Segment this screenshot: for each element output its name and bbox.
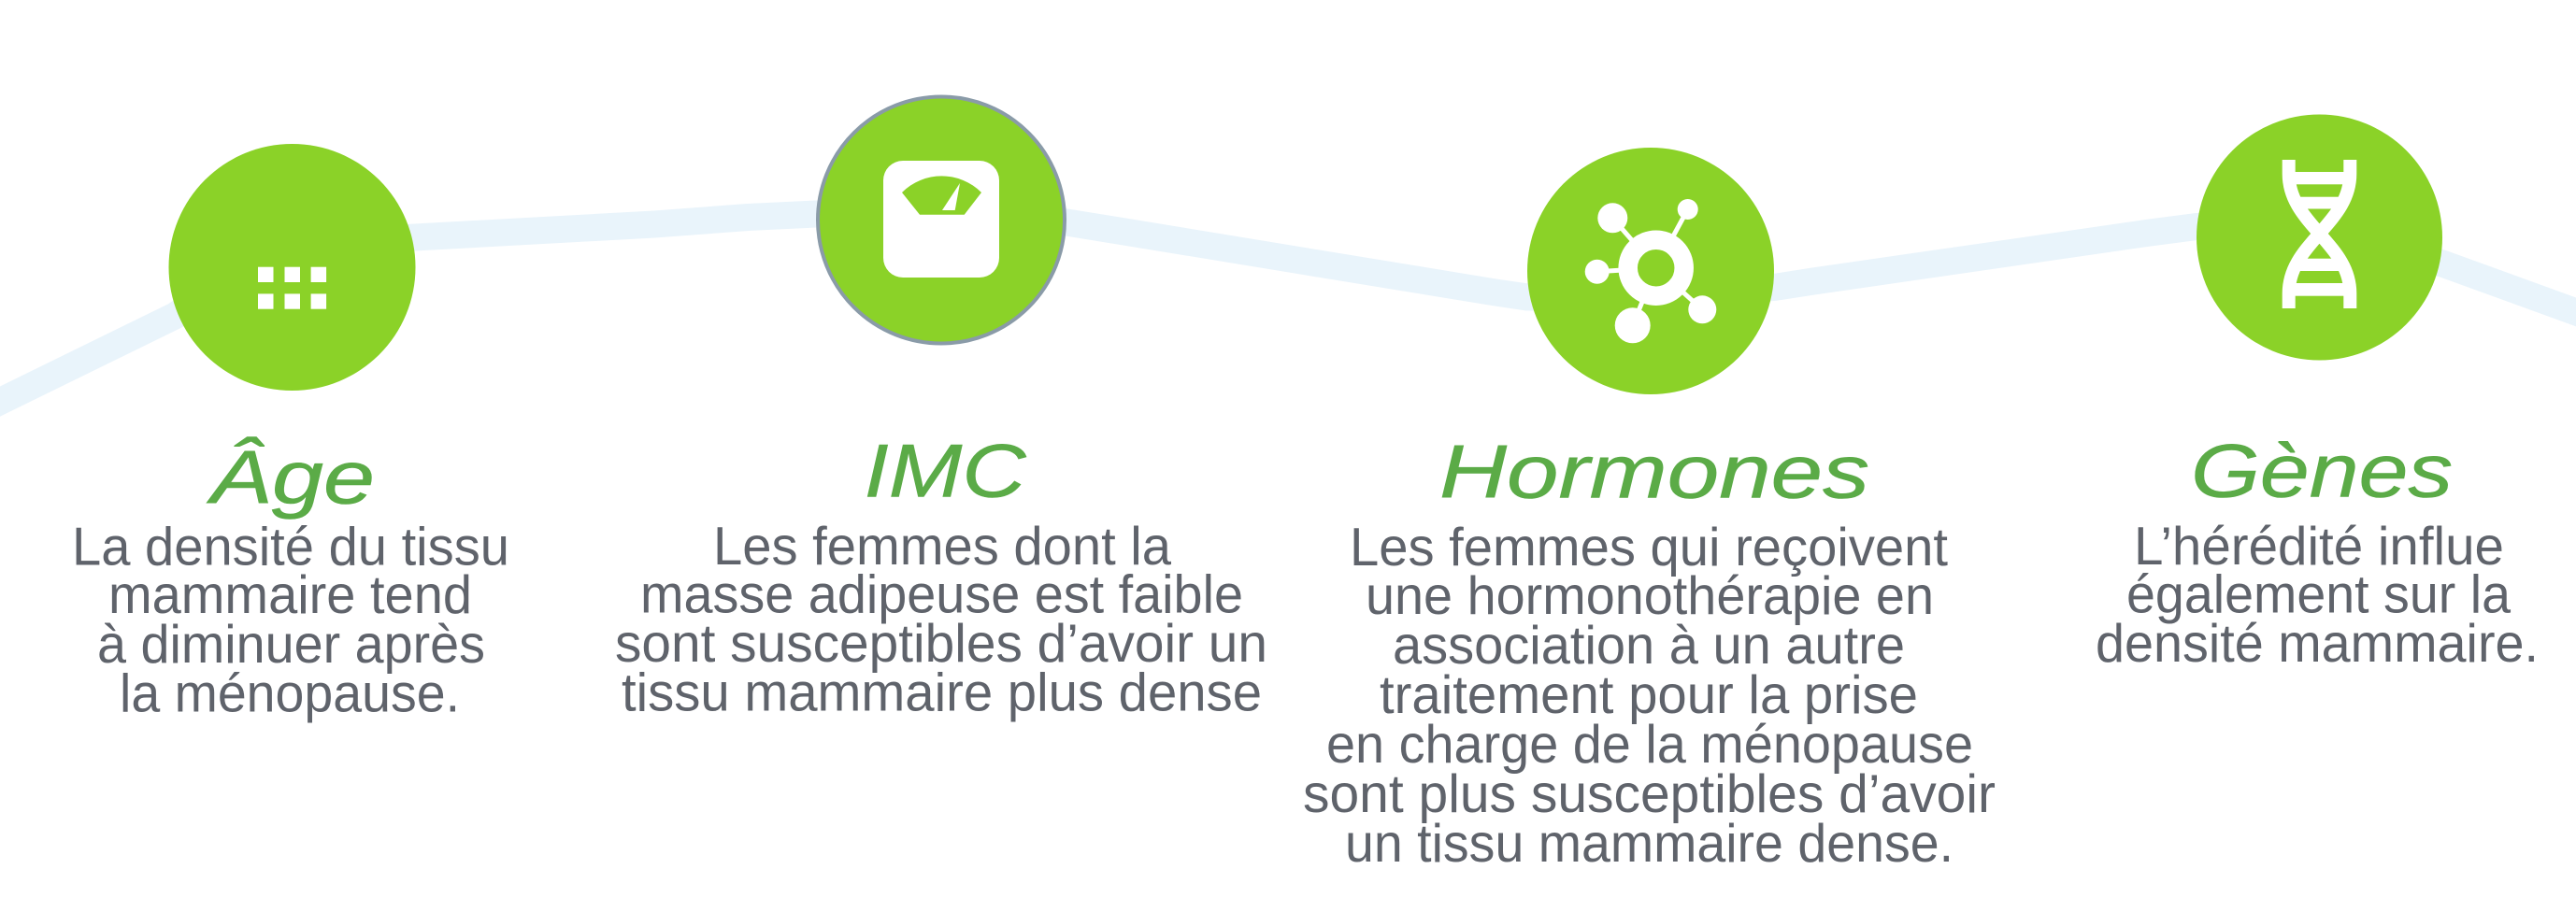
text block: hormones description: sont plus susceptibles d’avoir bbox=[1303, 764, 1996, 824]
text block: genes description bbox=[2096, 517, 2539, 674]
text block: hormones description: un tissu mammaire dense. bbox=[1345, 814, 1953, 874]
text block: BMI description: masse adipeuse est faible bbox=[640, 565, 1243, 625]
text block: hormones description bbox=[1303, 518, 1996, 874]
text block: BMI description: tissu mammaire plus dense bbox=[622, 663, 1262, 723]
text block: age description: mammaire tend bbox=[108, 565, 472, 625]
panel: genes bbox=[2096, 114, 2539, 674]
text block: BMI description: sont susceptibles d’avoir un bbox=[615, 614, 1267, 674]
text block: BMI description bbox=[615, 517, 1267, 723]
icon: age circle with grid bbox=[168, 144, 415, 391]
text block: age description: La densité du tissu bbox=[72, 518, 509, 577]
text block: age description bbox=[72, 518, 509, 724]
text block: hormones description: une hormonothérapie en bbox=[1366, 566, 1934, 626]
heading: hormones: Hormones bbox=[1439, 430, 1869, 514]
text block: age description: la ménopause. bbox=[120, 664, 460, 724]
heading: genes: Gènes bbox=[2191, 430, 2453, 514]
text block: age description: à diminuer après bbox=[97, 615, 485, 675]
text block: genes description: densité mammaire. bbox=[2096, 614, 2539, 674]
icon: molecule bbox=[1527, 148, 1774, 394]
panel: age bbox=[72, 144, 509, 724]
text block: hormones description: Les femmes qui reçoivent bbox=[1350, 518, 1948, 577]
text block: hormones description: association à un autre bbox=[1393, 616, 1905, 676]
text block: genes description: L’hérédité influe bbox=[2134, 517, 2504, 577]
text block: BMI description: Les femmes dont la bbox=[713, 517, 1171, 577]
connecting line bbox=[0, 214, 2576, 406]
panel: BMI bbox=[615, 97, 1267, 723]
panel: hormones bbox=[1303, 148, 1996, 874]
text block: hormones description: traitement pour la prise bbox=[1380, 665, 1918, 725]
icon: DNA helix bbox=[2197, 114, 2442, 361]
text block: genes description: également sur la bbox=[2126, 565, 2511, 625]
icon: scale bbox=[818, 97, 1065, 344]
text block: hormones description: en charge de la ménopause bbox=[1326, 715, 1973, 775]
heading: age: Âge bbox=[206, 436, 375, 520]
heading: BMI: IMC bbox=[864, 430, 1026, 514]
